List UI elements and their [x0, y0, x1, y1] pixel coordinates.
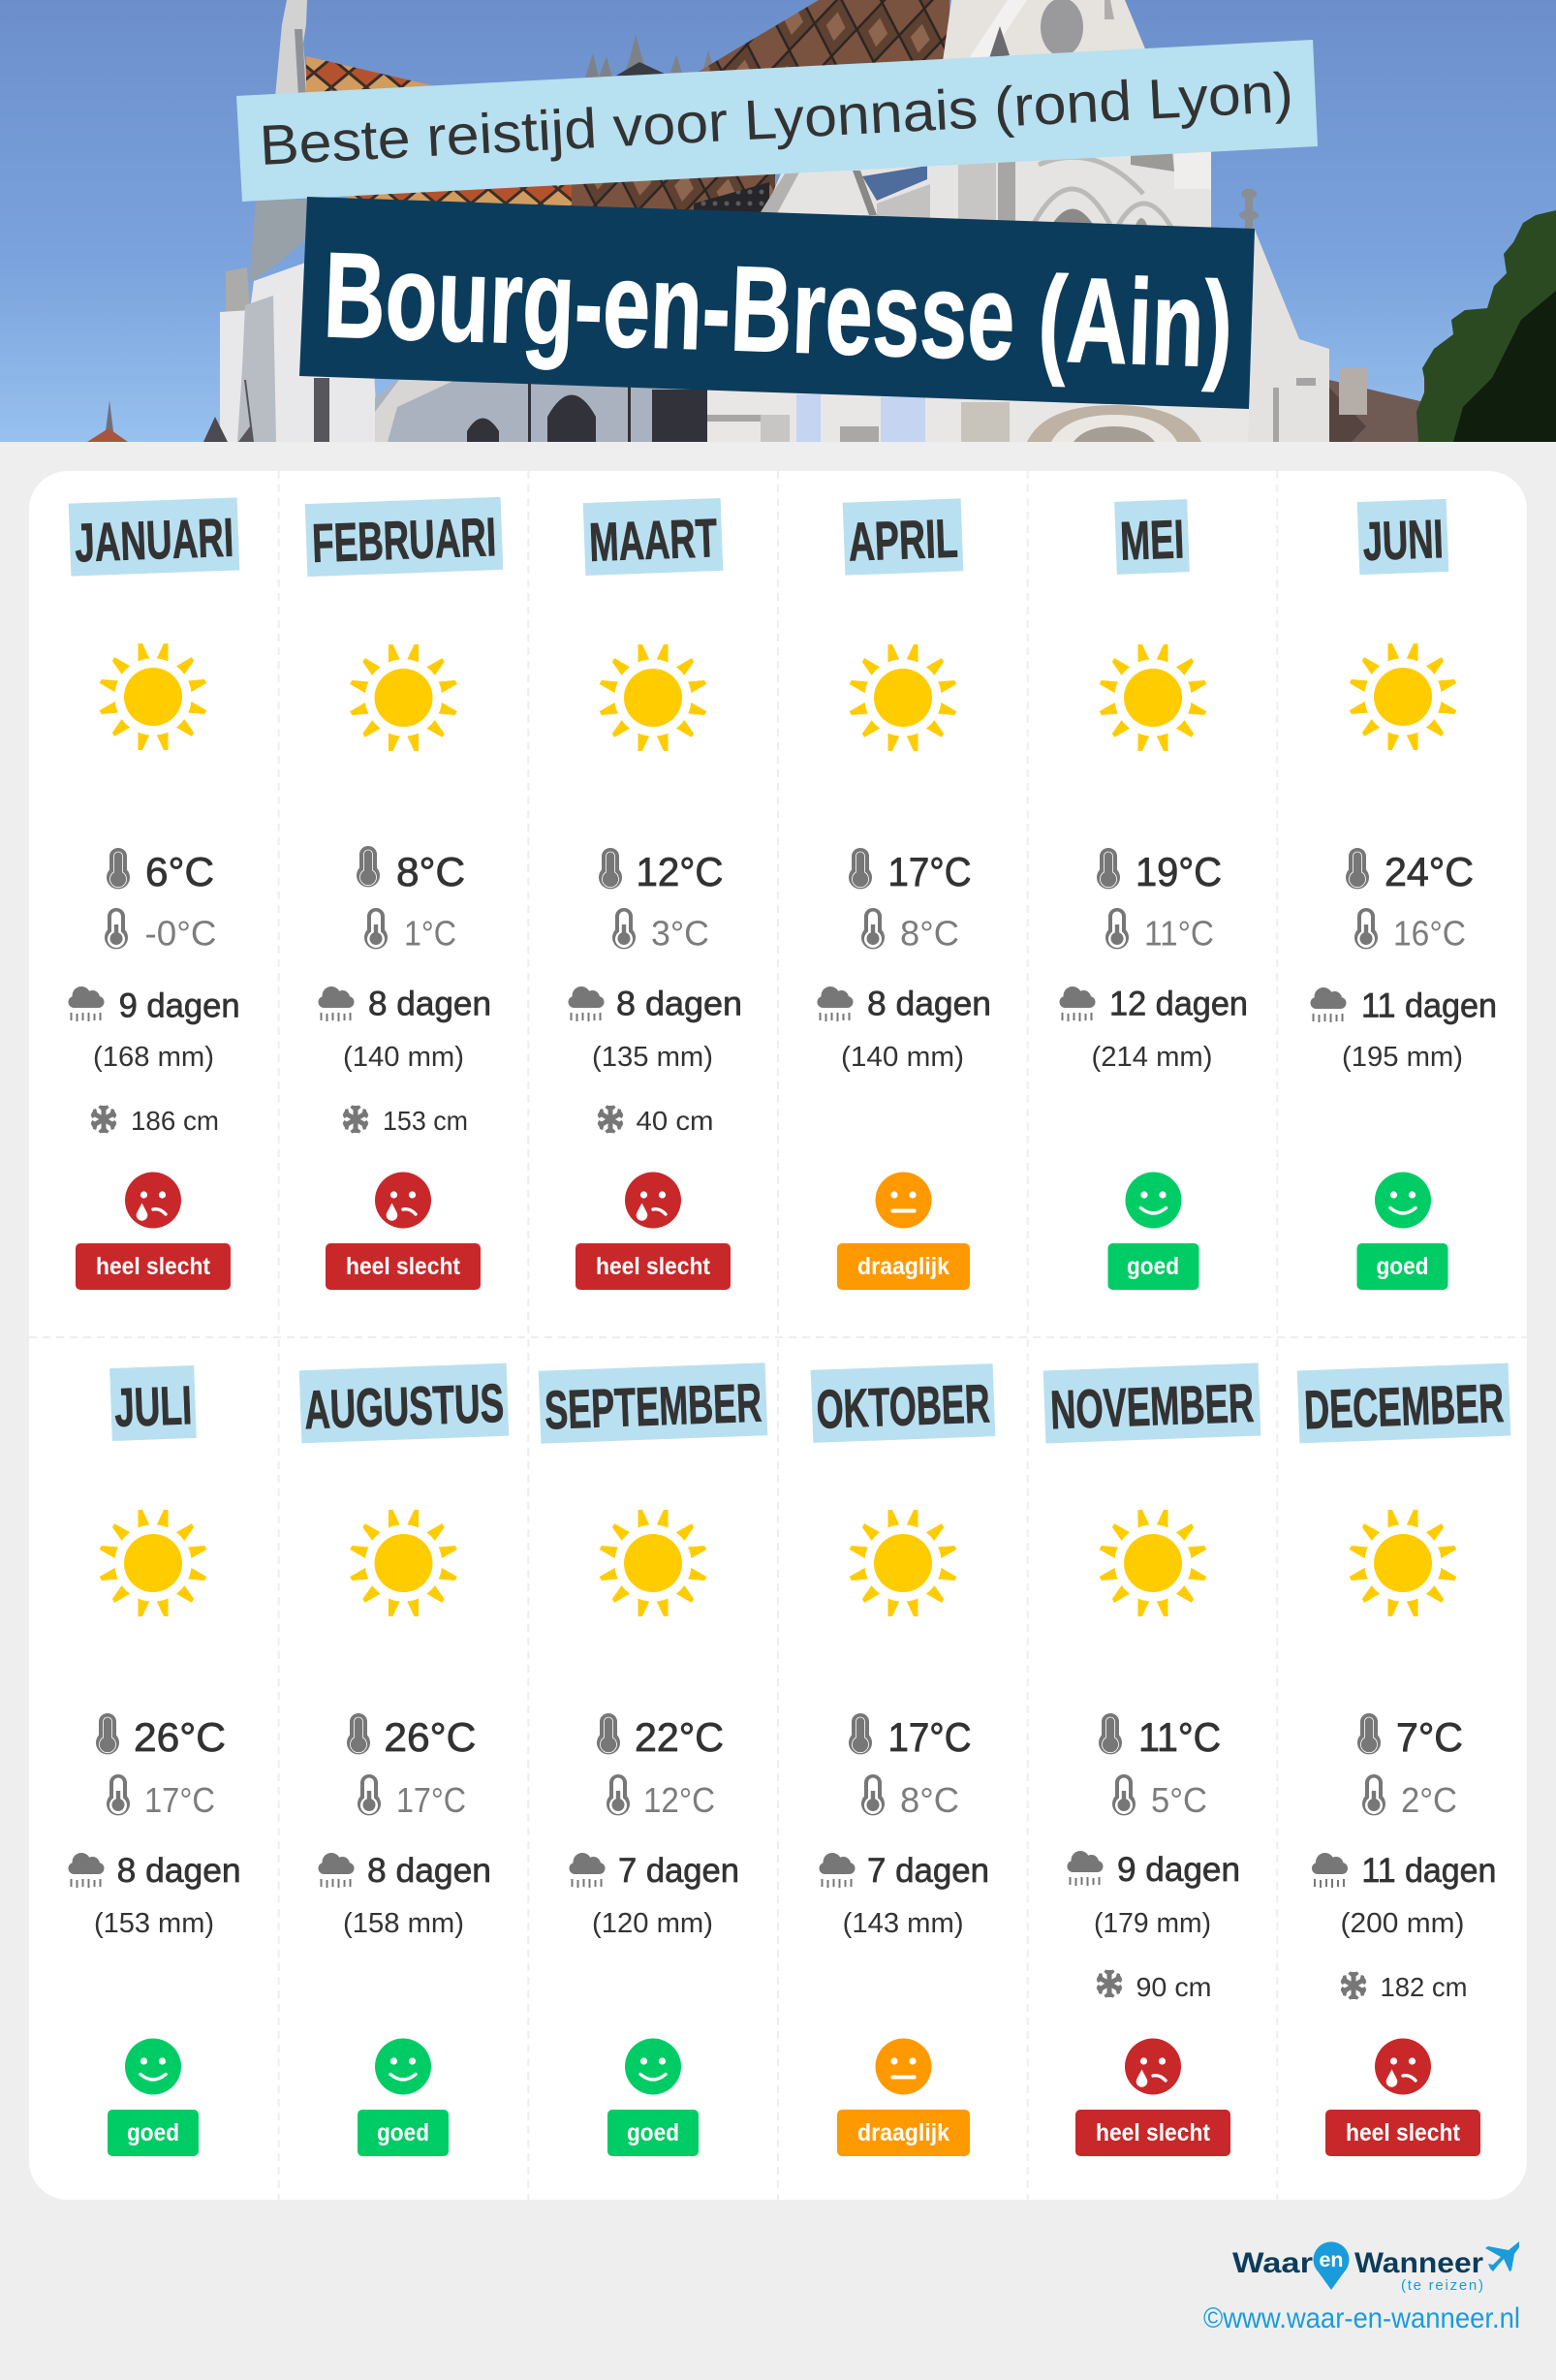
icon: rain cloud [318, 1853, 355, 1888]
icon: rain cloud [568, 986, 605, 1021]
rating: goed [1356, 1243, 1447, 1290]
rating: heel slecht [1075, 2110, 1230, 2156]
snow: 153 cm [383, 1106, 468, 1136]
copyright line: ©www.waar-en-wanneer.nl [1203, 2302, 1520, 2334]
rating: heel slecht [326, 1243, 481, 1290]
heading: NOVEMBER: NOVEMBER [1049, 1372, 1255, 1440]
rating: heel slecht [76, 1243, 231, 1290]
icon: thermometer high [1097, 848, 1120, 889]
logo: Waar en Wanneer [1232, 2241, 1519, 2294]
max temperature: 26°C [134, 1714, 226, 1760]
icon: snowflake [1097, 1970, 1122, 1997]
heading: MEI [1114, 499, 1190, 575]
max temperature: 8°C [396, 849, 465, 894]
rating: goed: goed [1376, 1253, 1428, 1280]
heading: JANUARI: JANUARI [74, 507, 234, 573]
rating: goed [108, 2110, 199, 2156]
icon: thermometer low [861, 1774, 885, 1815]
heading: AUGUSTUS: AUGUSTUS [303, 1372, 505, 1440]
month: juni [1310, 499, 1497, 1290]
tree at right [1416, 210, 1556, 442]
heading: SEPTEMBER: SEPTEMBER [544, 1371, 762, 1441]
icon: sun [1350, 1510, 1456, 1616]
icon: face tolerable [876, 1173, 932, 1229]
heading: APRIL: APRIL [848, 507, 959, 573]
icon: thermometer high [849, 848, 872, 889]
max temperature: 22°C [635, 1714, 724, 1760]
icon: thermometer low [364, 908, 388, 949]
heading: MAART [583, 498, 723, 576]
rain days: 12 dagen [1109, 985, 1248, 1023]
icon: rain cloud [820, 1853, 855, 1888]
rating: heel slecht: heel slecht [96, 1253, 211, 1280]
min temperature: 17°C [144, 1780, 215, 1820]
icon: snowflake [1341, 1972, 1366, 1999]
icon: sun [100, 643, 206, 750]
precipitation: (143 mm) [843, 1908, 964, 1939]
icon: thermometer high [96, 1713, 119, 1754]
heading: JUNI: JUNI [1361, 508, 1445, 572]
rating: goed: goed [1127, 1253, 1179, 1280]
rain days: 8 dagen [117, 1852, 241, 1890]
min temperature: -0°C [145, 913, 217, 954]
icon: snowflake [91, 1106, 116, 1133]
icon: face very bad [1375, 2039, 1431, 2095]
icon: rain cloud [1068, 1851, 1103, 1886]
month: januari [68, 497, 240, 1290]
icon: location pin [1314, 2241, 1349, 2290]
icon: thermometer low [861, 908, 885, 949]
precipitation: (168 mm) [93, 1042, 214, 1073]
heading: AUGUSTUS [299, 1363, 509, 1443]
icon: sun [350, 1510, 457, 1616]
max temperature: 19°C [1136, 849, 1222, 894]
icon: plane [1485, 2241, 1519, 2271]
rating: heel slecht [1325, 2110, 1480, 2156]
max temperature: 17°C [887, 849, 971, 894]
min temperature: 3°C [651, 913, 709, 954]
rating: draaglijk [837, 1243, 970, 1290]
precipitation: (179 mm) [1094, 1908, 1211, 1939]
icon: thermometer low [1362, 1774, 1385, 1815]
icon: thermometer high [597, 1713, 620, 1754]
logo: Waar en Wanneer: Waar [1232, 2247, 1313, 2279]
heading: SEPTEMBER [539, 1362, 767, 1444]
icon: rain cloud [570, 1853, 605, 1888]
icon: face very bad [125, 1173, 181, 1229]
heading: MAART: MAART [588, 507, 718, 573]
panel: white climate table [29, 471, 1527, 2200]
rain days: 11 dagen [1361, 986, 1497, 1025]
snow: 90 cm [1136, 1972, 1211, 2002]
max temperature: 7°C [1396, 1714, 1463, 1760]
min temperature: 2°C [1401, 1780, 1457, 1820]
icon: face good [625, 2039, 681, 2095]
max temperature: 26°C [384, 1714, 476, 1760]
month: augustus [299, 1363, 509, 2156]
icon: thermometer high [599, 848, 622, 889]
precipitation: (135 mm) [592, 1042, 713, 1073]
icon: thermometer low [358, 1774, 381, 1815]
icon: sun [600, 1510, 706, 1616]
month: maart [568, 498, 742, 1290]
rating: draaglijk [837, 2110, 970, 2156]
icon: face tolerable [876, 2039, 932, 2095]
icon: thermometer high [1346, 848, 1369, 889]
min temperature: 8°C [900, 1780, 959, 1820]
icon: thermometer low [1105, 908, 1129, 949]
rating: heel slecht: heel slecht [1346, 2119, 1461, 2146]
precipitation: (140 mm) [841, 1042, 964, 1073]
rating: goed: goed [127, 2119, 179, 2146]
rain days: 8 dagen [368, 985, 491, 1023]
precipitation: (195 mm) [1342, 1042, 1463, 1073]
snow: 186 cm [131, 1106, 219, 1136]
icon: rain cloud [1060, 986, 1095, 1021]
icon: sun [850, 1510, 956, 1616]
icon: thermometer high [357, 846, 380, 887]
rating: draaglijk: draaglijk [857, 1253, 949, 1280]
heading: FEBRUARI [305, 497, 503, 577]
icon: thermometer high [347, 1713, 370, 1754]
icon: sun [1100, 644, 1206, 751]
heading: JULI [109, 1365, 197, 1441]
heading: JUNI [1357, 499, 1448, 575]
icon: sun [850, 644, 956, 751]
precipitation: (200 mm) [1341, 1908, 1465, 1939]
max temperature: 6°C [145, 849, 214, 894]
icon: thermometer low [107, 1774, 130, 1815]
subtitle banner: Beste reistijd voor Lyonnais (rond Lyon) [258, 61, 1294, 177]
rating: goed [607, 2110, 699, 2156]
icon: face very bad [375, 1173, 431, 1229]
logo: Waar en Wanneer: Wanneer [1354, 2247, 1483, 2279]
month: november [1043, 1363, 1260, 2156]
rating: goed: goed [627, 2119, 679, 2146]
rating: goed [358, 2110, 449, 2156]
icon: thermometer high [107, 848, 130, 889]
icon: thermometer low [607, 1774, 630, 1815]
icon: face good [375, 2039, 431, 2095]
month: september [539, 1362, 767, 2156]
rain days: 8 dagen [616, 985, 742, 1023]
icon: face good [125, 2039, 181, 2095]
precipitation: (214 mm) [1091, 1042, 1213, 1073]
month: februari [305, 497, 503, 1290]
heading: FEBRUARI: FEBRUARI [311, 506, 497, 574]
icon: rain cloud [818, 986, 853, 1021]
month: juli [68, 1365, 241, 2156]
month: december [1297, 1363, 1510, 2156]
max temperature: 12°C [636, 849, 723, 894]
rating: goed [1108, 1243, 1199, 1290]
rain days: 9 dagen [119, 986, 240, 1025]
title banner [299, 197, 1255, 409]
heading: OKTOBER [811, 1363, 995, 1443]
snow: 182 cm [1380, 1972, 1467, 2002]
icon: face good [1375, 1173, 1431, 1229]
rain days: 7 dagen [867, 1852, 989, 1890]
heading: OKTOBER: OKTOBER [816, 1372, 991, 1440]
min temperature: 12°C [643, 1780, 715, 1820]
max temperature: 17°C [887, 1714, 971, 1760]
min temperature: 5°C [1151, 1780, 1207, 1820]
subtitle banner [236, 40, 1318, 202]
icon: rain cloud [1312, 1853, 1348, 1888]
icon: location pin: en [1320, 2249, 1343, 2271]
icon: thermometer low [1112, 1774, 1136, 1815]
heading: NOVEMBER [1043, 1363, 1260, 1443]
icon: sun [1350, 643, 1456, 750]
snow: 40 cm [636, 1106, 713, 1136]
icon: snowflake [343, 1106, 368, 1133]
icon: snowflake [599, 1106, 622, 1133]
logo: Waar en Wanneer: (te reizen) [1401, 2277, 1483, 2294]
icon: thermometer low [105, 908, 128, 949]
rain days: 9 dagen [1117, 1851, 1240, 1889]
precipitation: (120 mm) [592, 1908, 713, 1939]
precipitation: (153 mm) [94, 1908, 214, 1939]
icon: sun [350, 644, 457, 751]
icon: thermometer high [1357, 1713, 1381, 1754]
heading: APRIL [843, 498, 963, 576]
icon: face very bad [625, 1173, 681, 1229]
icon: thermometer low [1354, 908, 1378, 949]
rating: heel slecht: heel slecht [346, 1253, 461, 1280]
icon: thermometer high [849, 1713, 872, 1754]
header photo: Bourg-en-Bresse monastery against blue sky [0, 0, 1556, 442]
min temperature: 8°C [900, 913, 959, 954]
icon: face very bad [1125, 2039, 1181, 2095]
rating: goed: goed [377, 2119, 429, 2146]
icon: rain cloud [1310, 987, 1347, 1022]
icon: rain cloud [68, 1853, 105, 1888]
icon: sun [1100, 1510, 1206, 1616]
icon: rain cloud [68, 986, 105, 1021]
icon: sun [600, 644, 706, 751]
min temperature: 11°C [1144, 913, 1214, 954]
month: mei [1060, 499, 1248, 1290]
rating: heel slecht: heel slecht [596, 1253, 711, 1280]
min temperature: 17°C [396, 1780, 466, 1820]
max temperature: 11°C [1138, 1714, 1221, 1760]
rain days: 11 dagen [1361, 1852, 1496, 1890]
rain days: 7 dagen [618, 1852, 739, 1890]
month: april [818, 498, 991, 1290]
icon: thermometer high [1099, 1713, 1122, 1754]
month: oktober [811, 1363, 995, 2156]
max temperature: 24°C [1385, 849, 1474, 894]
icon: face good [1126, 1173, 1182, 1229]
rating: heel slecht: heel slecht [1096, 2119, 1211, 2146]
precipitation: (158 mm) [343, 1908, 464, 1939]
min temperature: 1°C [404, 913, 456, 954]
heading: JANUARI [69, 497, 239, 577]
heading: MEI: MEI [1119, 508, 1185, 572]
icon: rain cloud [318, 986, 355, 1021]
icon: sun [100, 1510, 206, 1616]
small spire far left [87, 400, 128, 442]
rain days: 8 dagen [367, 1852, 491, 1890]
rating: draaglijk: draaglijk [857, 2119, 949, 2146]
icon: thermometer low [612, 908, 636, 949]
min temperature: 16°C [1393, 913, 1466, 954]
heading: JULI: JULI [113, 1374, 193, 1438]
rain days: 8 dagen [867, 985, 991, 1023]
precipitation: (140 mm) [343, 1042, 464, 1073]
rating: heel slecht [576, 1243, 731, 1290]
